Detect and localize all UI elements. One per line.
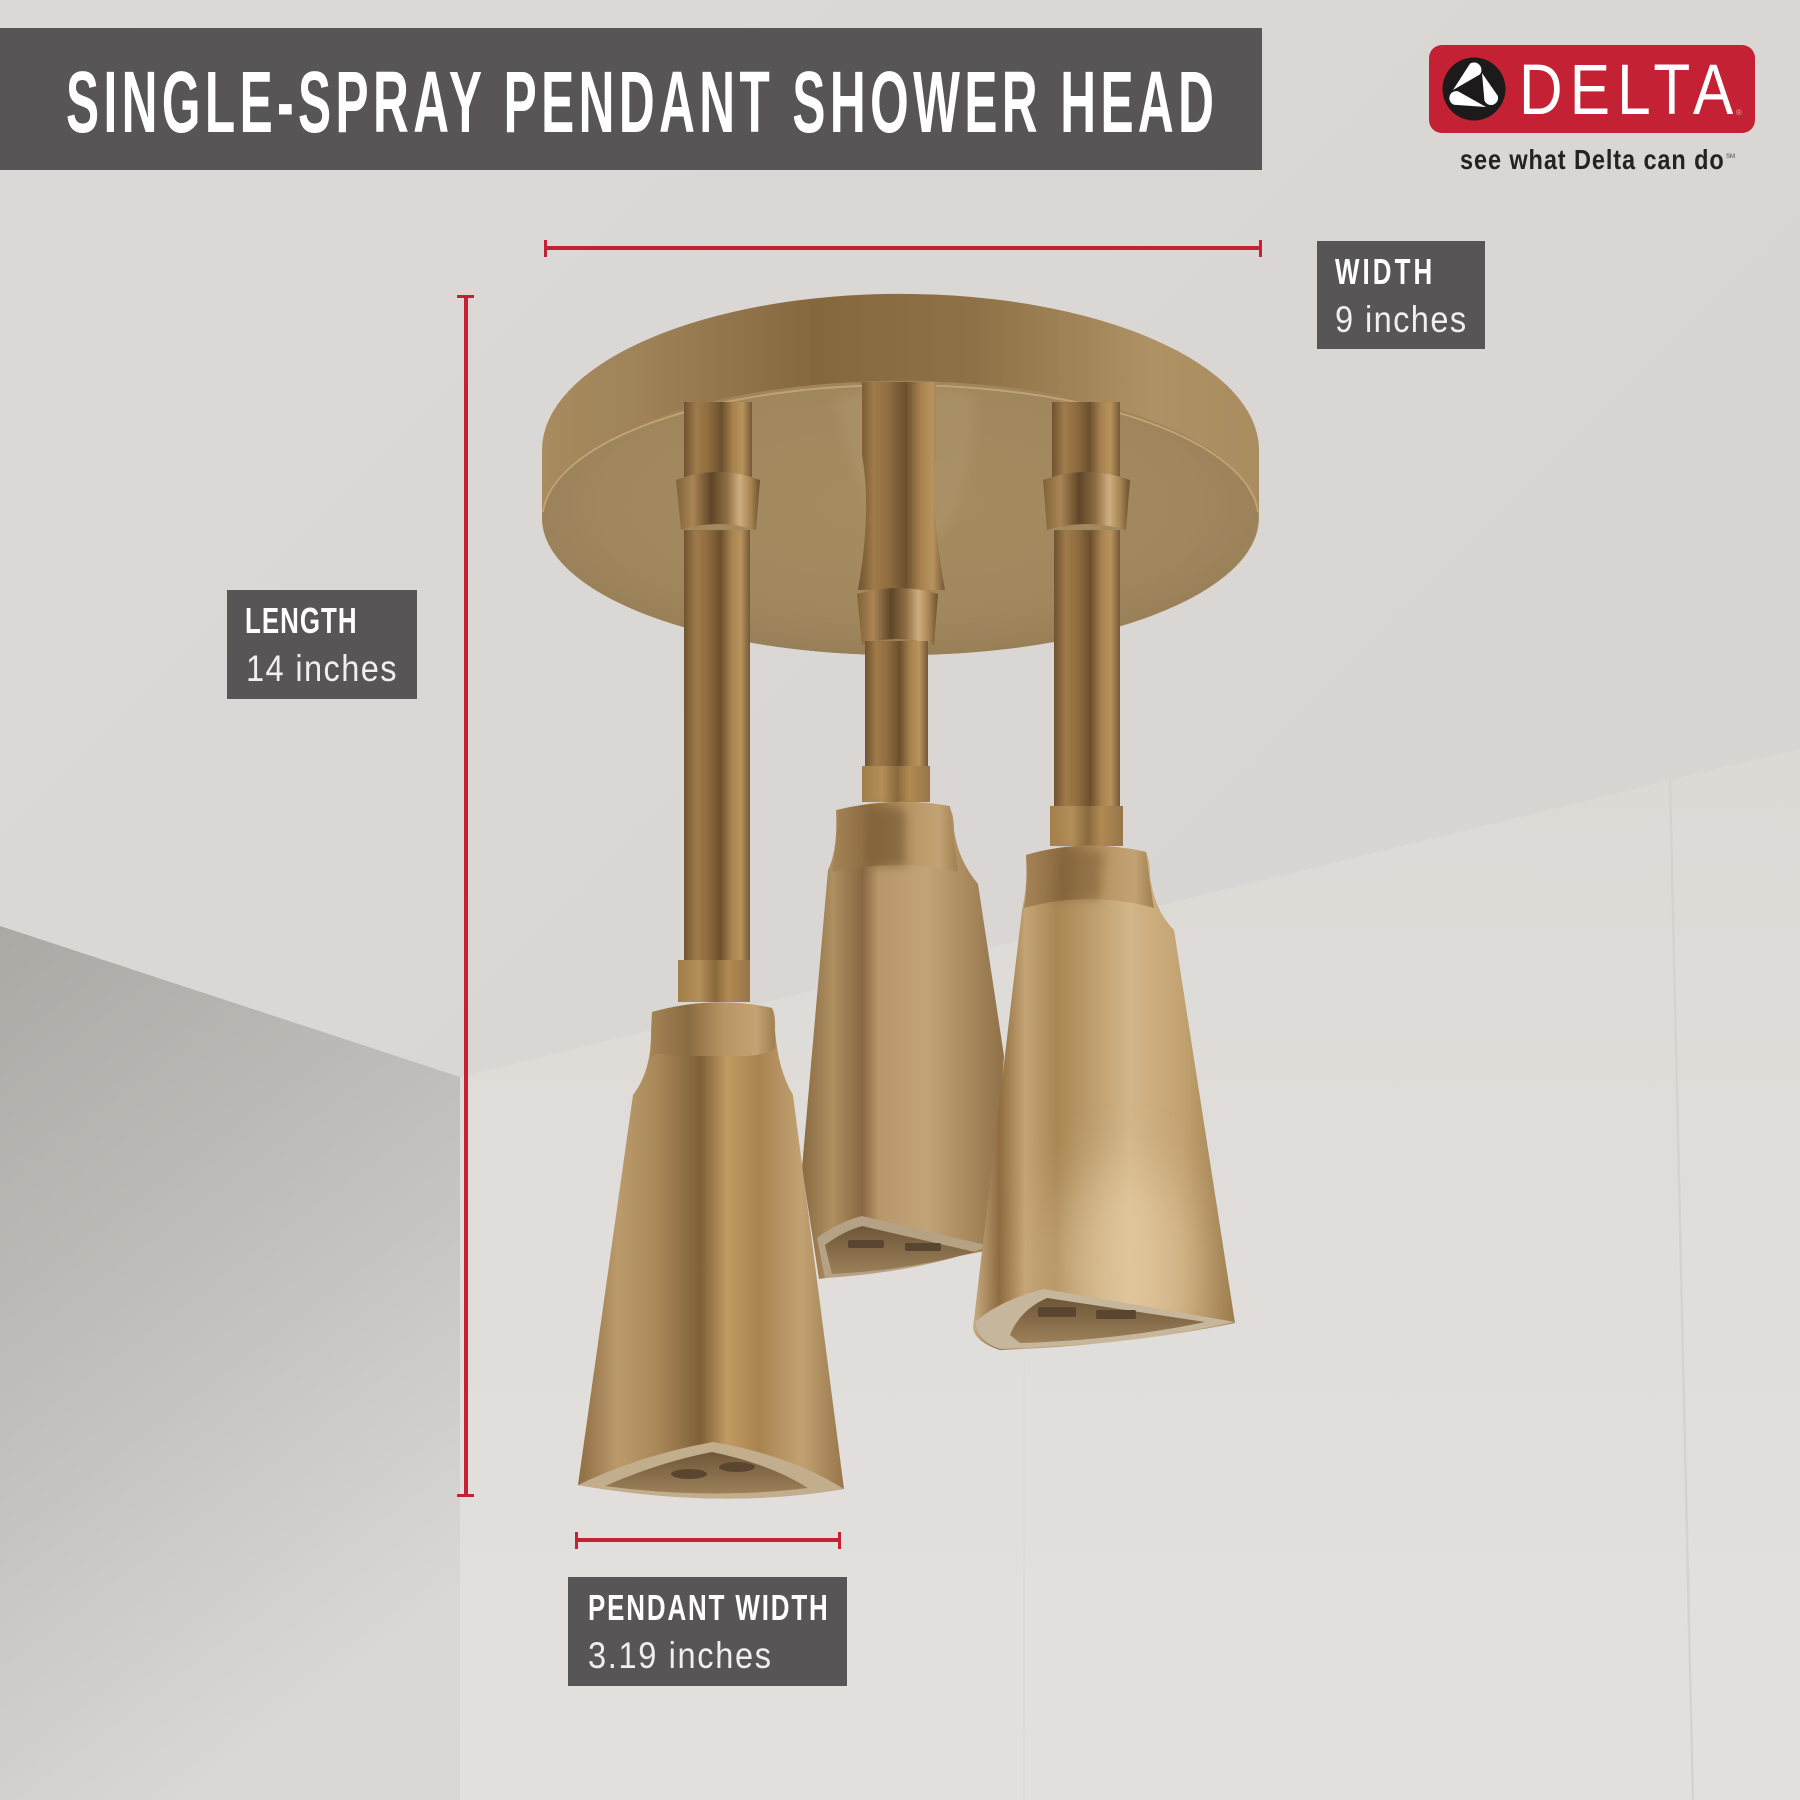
label: pendant width: 3.19 inches [588,1635,771,1676]
label: width [1317,241,1485,349]
shower head product [542,294,1259,1499]
center pendant spray face [817,1216,990,1278]
Delta logo [1429,45,1755,175]
logo red badge [1429,45,1755,133]
dimension line: pendant width [575,1532,841,1549]
label: length [227,590,417,699]
logo wordmark: DELTA [1519,49,1733,129]
ceiling plate [542,294,1259,655]
center stem nut [862,766,930,802]
right stem reflection [1052,402,1120,478]
center pendant [802,802,1004,1279]
label: width: WIDTH [1335,252,1432,292]
right pendant spray face [975,1289,1235,1349]
right stem nut [1050,806,1123,846]
right stem tube [1054,530,1120,808]
label: length: LENGTH [245,601,357,641]
background: tiled wall [460,749,1800,1800]
center stem collar [857,588,938,645]
right pendant [973,846,1235,1380]
background: grey side wall [0,926,460,1800]
left pendant spray face [578,1442,844,1499]
left pendant [578,1002,844,1499]
background: tile seams [1024,781,1693,1800]
left stem nut [678,960,750,1002]
dimension line: length [457,295,474,1497]
logo service mark: SM [1726,154,1735,160]
logo registered mark: ® [1736,108,1742,117]
label: width: 9 inches [1335,299,1466,340]
title bar: SINGLE-SPRAY PENDANT SHOWER HEAD [66,55,1214,152]
label: length: 14 inches [246,648,396,689]
left stem tube [684,530,750,962]
logo emblem [1442,58,1506,120]
dimension line: width [544,240,1262,257]
label: pendant width [568,1577,847,1686]
left stem collar [676,472,760,530]
logo tagline: see what Delta can do [1460,145,1724,175]
left stem reflection [684,402,752,480]
right stem collar [1043,472,1130,530]
center stem reflection [858,382,945,590]
center stem tube [865,641,928,768]
label: pendant width: PENDANT WIDTH [588,1588,828,1628]
title bar [0,28,1262,170]
